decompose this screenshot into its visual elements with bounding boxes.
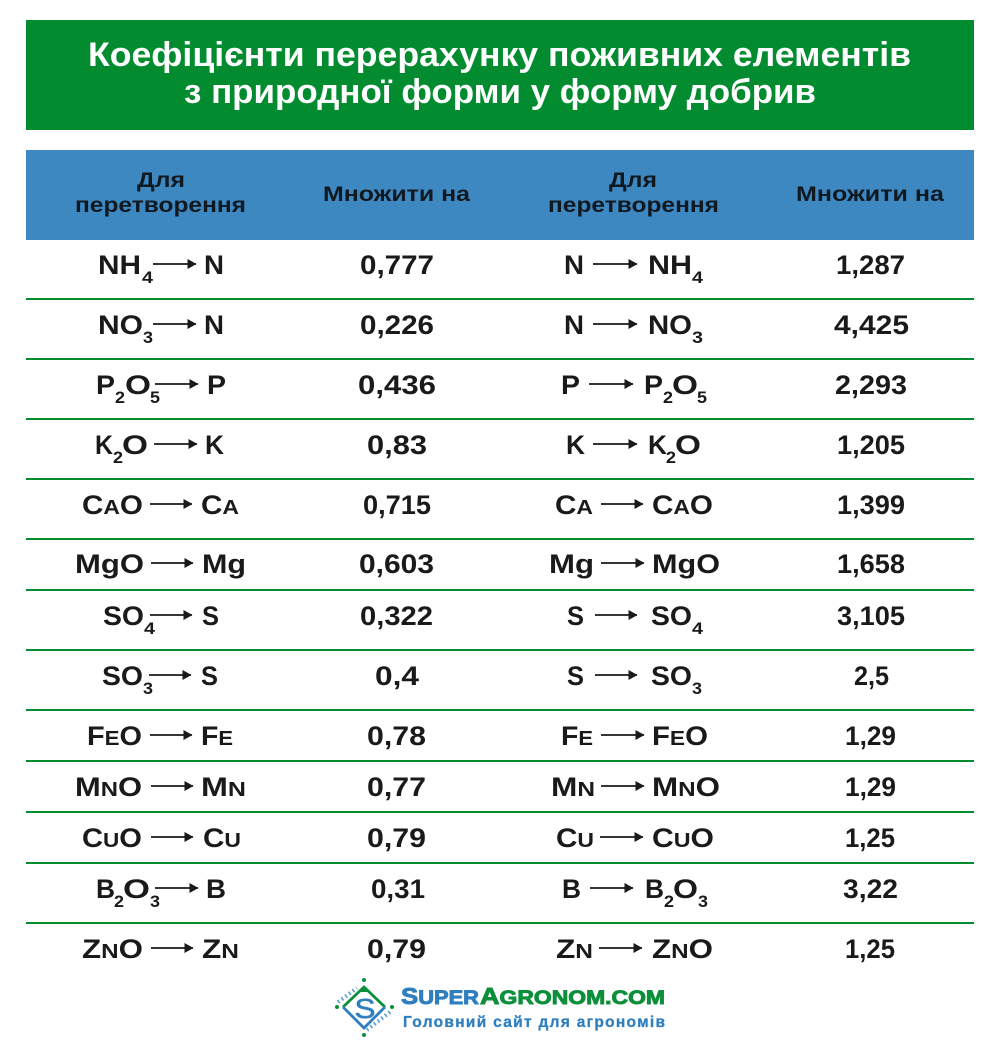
row: SO4 / S: S (567, 601, 584, 631)
table header: Множити на (796, 182, 945, 206)
title banner: Коефіцієнти перерахунку поживних елементів (88, 36, 911, 74)
row: P2O5 / P: P (561, 370, 580, 400)
row: MnO / Mn: 1,29 (845, 772, 896, 802)
row: MgO / Mg: MgO (652, 549, 720, 579)
row: P2O5 / P: P (96, 370, 115, 400)
row: CuO / Cu: CUO (82, 823, 142, 853)
row: NO3 / N: 4,425 (834, 310, 909, 340)
row: K2O / K (95, 430, 905, 467)
row: B2O3 / B: O (123, 874, 150, 904)
row: NO3 / N: 3 (143, 328, 153, 347)
row: MnO / Mn: MN (551, 772, 595, 802)
row: B2O3 / B: O (673, 874, 698, 904)
title banner (26, 20, 974, 130)
row: CuO / Cu (82, 823, 895, 853)
row: SO3 / S: SO (651, 661, 692, 691)
row: CaO / Ca: CA (201, 490, 239, 520)
row: SO3 / S: 3 (143, 679, 153, 698)
row: NH4 / N: 1,287 (836, 250, 905, 280)
row: NH4 / N (98, 250, 905, 287)
logo tagline: Головний сайт для агрономів (403, 1014, 665, 1031)
row: MnO / Mn: MN (201, 772, 246, 802)
row: P2O5 / P: 2,293 (835, 370, 907, 400)
row: FeO / Fe: FE (201, 721, 233, 751)
row: MgO / Mg: Mg (202, 549, 246, 579)
row: K2O / K: K (648, 430, 667, 460)
logo wordmark: AGRONOM.COM (480, 983, 665, 1009)
row: CuO / Cu: CU (556, 823, 594, 853)
logo wordmark (401, 983, 665, 1009)
row: NO3 / N: NO (98, 310, 143, 340)
row: SO3 / S: S (201, 661, 218, 691)
row: CuO / Cu: 1,25 (845, 823, 895, 853)
row: ZnO / Zn (82, 934, 895, 964)
row: P2O5 / P: 5 (697, 388, 707, 407)
row: SO3 / S: 2,5 (854, 661, 889, 691)
table header: перетворення (75, 193, 246, 217)
row: NO3 / N: 3 (692, 328, 703, 347)
row: MnO / Mn: MNO (75, 772, 142, 802)
row: NH4 / N: N (204, 250, 224, 280)
row dividers (26, 298, 974, 924)
row: NO3 / N: N (564, 310, 584, 340)
row: SO3 / S: SO (102, 661, 143, 691)
row: B2O3 / B (96, 874, 898, 911)
row: B2O3 / B: 3 (150, 892, 160, 911)
row: NO3 / N: NO (648, 310, 692, 340)
row: NO3 / N: 0,226 (360, 310, 434, 340)
row: B2O3 / B: 3,22 (843, 874, 898, 904)
table header (26, 150, 974, 240)
row: FeO / Fe: 1,29 (845, 721, 896, 751)
row: CuO / Cu: 0,79 (367, 823, 426, 853)
row: MgO / Mg: 1,658 (837, 549, 905, 579)
row: SO3 / S (102, 661, 889, 698)
row: MgO / Mg: MgO (75, 549, 144, 579)
row: FeO / Fe: FE (561, 721, 593, 751)
row: ZnO / Zn: 0,79 (367, 934, 426, 964)
row: CaO / Ca (82, 490, 905, 520)
row: CaO / Ca: CAO (82, 490, 143, 520)
row: CaO / Ca: CA (555, 490, 593, 520)
row: ZnO / Zn: ZN (202, 934, 239, 964)
row: NH4 / N: NH (98, 250, 141, 280)
row: B2O3 / B: B (562, 874, 581, 904)
row: MnO / Mn: MNO (652, 772, 720, 802)
row: NH4 / N: NH (648, 250, 692, 280)
row: ZnO / Zn: ZNO (652, 934, 713, 964)
row: NO3 / N: N (204, 310, 224, 340)
row: MgO / Mg: 0,603 (359, 549, 434, 579)
row: SO4 / S: S (202, 601, 219, 631)
row: P2O5 / P (96, 370, 907, 407)
row: P2O5 / P: 0,436 (358, 370, 436, 400)
row: SO4 / S: 3,105 (837, 601, 905, 631)
row: MgO / Mg: Mg (549, 549, 594, 579)
row: NH4 / N: N (564, 250, 584, 280)
row: SO3 / S: 0,4 (375, 661, 419, 691)
row: MgO / Mg (75, 549, 905, 579)
row: CaO / Ca: 1,399 (837, 490, 905, 520)
row: SO3 / S: S (567, 661, 584, 691)
row: K2O / K: K (205, 430, 224, 460)
row: P2O5 / P: P (644, 370, 663, 400)
row: CuO / Cu: CU (203, 823, 241, 853)
row: B2O3 / B: 0,31 (371, 874, 425, 904)
row: SO4 / S: 4 (144, 619, 156, 638)
row: K2O / K: 2 (113, 448, 123, 467)
row: B2O3 / B: 2 (114, 892, 124, 911)
row: SO3 / S: 3 (692, 679, 702, 698)
row: SO4 / S: 4 (692, 619, 704, 638)
row: NH4 / N: 0,777 (360, 250, 434, 280)
row: ZnO / Zn: ZNO (82, 934, 143, 964)
row: K2O / K: 0,83 (367, 430, 427, 460)
row: B2O3 / B: B (96, 874, 115, 904)
table header: Множити на (323, 182, 471, 206)
row: SO4 / S: SO (651, 601, 692, 631)
logo wordmark: SUPER (401, 983, 479, 1009)
table header: Для (137, 168, 185, 192)
row: CaO / Ca: 0,715 (363, 490, 431, 520)
row: SO4 / S: SO (103, 601, 144, 631)
row: ZnO / Zn: ZN (556, 934, 593, 964)
row: SO4 / S: 0,322 (360, 601, 433, 631)
row: K2O / K: O (675, 430, 701, 460)
row: K2O / K: 1,205 (837, 430, 905, 460)
row: MnO / Mn (75, 772, 896, 802)
row: FeO / Fe: 0,78 (367, 721, 426, 751)
row: K2O / K: O (122, 430, 148, 460)
row: FeO / Fe: FEO (652, 721, 708, 751)
row: P2O5 / P: O (125, 370, 151, 400)
row: CuO / Cu: CUO (652, 823, 714, 853)
row: ZnO / Zn: 1,25 (845, 934, 895, 964)
row: NH4 / N: 4 (142, 268, 154, 287)
row: SO4 / S (103, 601, 905, 638)
row: FeO / Fe: FEO (87, 721, 142, 751)
row: MnO / Mn: 0,77 (367, 772, 426, 802)
row: K2O / K: K (566, 430, 585, 460)
row: P2O5 / P: P (207, 370, 226, 400)
row: K2O / K: 2 (666, 448, 676, 467)
row: NO3 / N (98, 310, 909, 347)
row: CaO / Ca: CAO (652, 490, 713, 520)
row: B2O3 / B: 3 (698, 892, 708, 911)
row: B2O3 / B: B (206, 874, 226, 904)
icon: SuperAgronom logo mark: S (354, 993, 376, 1024)
row: B2O3 / B: 2 (664, 892, 674, 911)
row: NH4 / N: 4 (692, 268, 704, 287)
row: FeO / Fe (87, 721, 896, 751)
title banner: з природної форми у форму добрив (184, 73, 816, 111)
row: P2O5 / P: 5 (150, 388, 160, 407)
row: P2O5 / P: 2 (663, 388, 673, 407)
table header: перетворення (548, 193, 719, 217)
icon: SuperAgronom logo mark (335, 978, 394, 1037)
row: P2O5 / P: O (672, 370, 698, 400)
row: P2O5 / P: 2 (115, 388, 125, 407)
row: K2O / K: K (95, 430, 113, 460)
row: B2O3 / B: B (645, 874, 664, 904)
table header: Для (609, 168, 657, 192)
